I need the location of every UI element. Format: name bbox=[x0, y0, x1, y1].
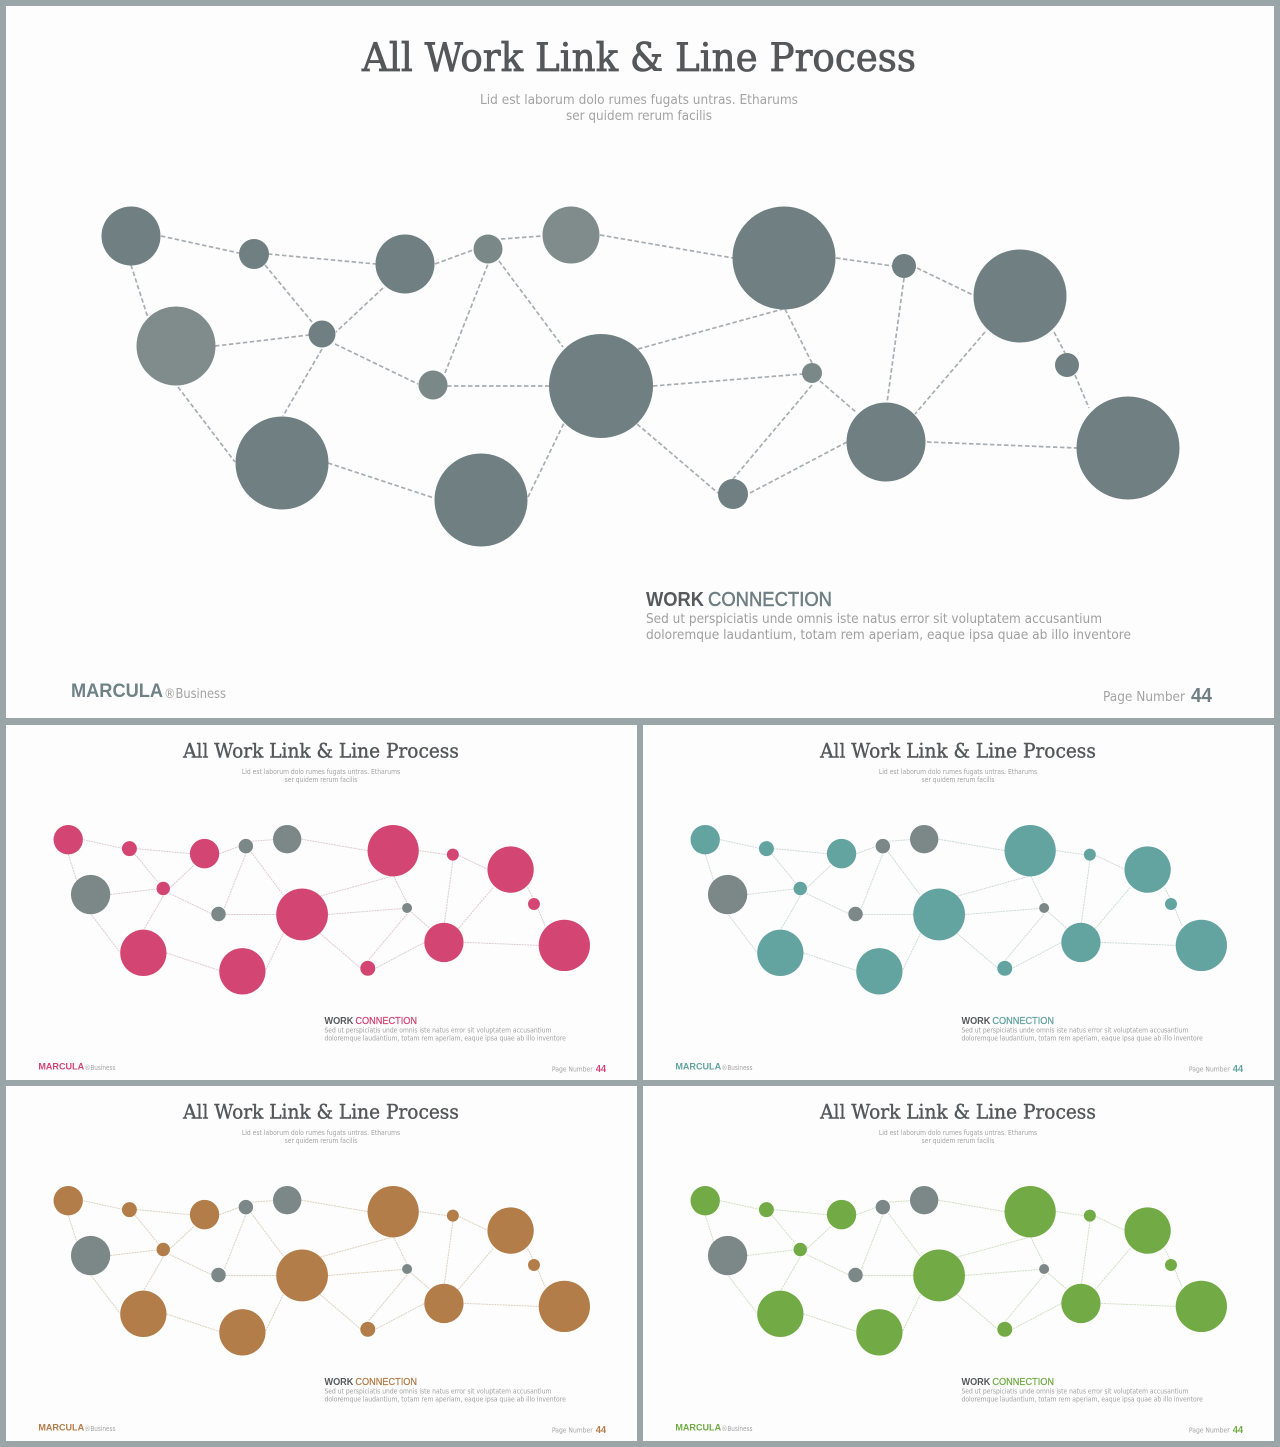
page number: 44 bbox=[596, 1425, 607, 1436]
page number: Page Number bbox=[552, 1427, 593, 1435]
heading: work connection bbox=[324, 1377, 417, 1388]
subtitle bbox=[480, 92, 798, 124]
heading: work connection: WORK bbox=[961, 1377, 991, 1388]
subtitle: Lid est laborum dolo rumes fugats untras. Etharums bbox=[242, 768, 401, 776]
brand logo: MARCULA bbox=[71, 681, 163, 702]
heading: work connection: CONNECTION bbox=[992, 1016, 1054, 1027]
page number: 44 bbox=[1233, 1425, 1244, 1436]
subtitle: ser quidem rerum facilis bbox=[285, 776, 358, 784]
brand logo bbox=[38, 1062, 116, 1073]
page number bbox=[1103, 685, 1213, 707]
heading: work connection bbox=[324, 1016, 417, 1027]
brand logo bbox=[71, 681, 226, 702]
body text bbox=[324, 1388, 566, 1404]
subtitle: ser quidem rerum facilis bbox=[285, 1137, 358, 1145]
subtitle bbox=[242, 1129, 401, 1145]
heading: work connection: WORK bbox=[324, 1016, 354, 1027]
body text bbox=[646, 611, 1131, 643]
subtitle: Lid est laborum dolo rumes fugats untras. Etharums bbox=[879, 1129, 1038, 1137]
network connection lines bbox=[131, 235, 1089, 498]
network connection lines bbox=[68, 839, 545, 970]
title: All Work Link & Line Process bbox=[361, 36, 916, 81]
page number: Page Number bbox=[1103, 689, 1185, 705]
heading: work connection: CONNECTION bbox=[355, 1377, 417, 1388]
panel: pink slide bbox=[6, 725, 637, 1080]
brand logo: MARCULA bbox=[675, 1062, 721, 1073]
brand logo: ®Business bbox=[85, 1064, 116, 1072]
network nodes bbox=[54, 1186, 590, 1355]
page number bbox=[552, 1064, 607, 1075]
panel: green slide bbox=[643, 1086, 1274, 1441]
heading: work connection bbox=[961, 1016, 1054, 1027]
page number bbox=[552, 1425, 607, 1436]
brand logo: ®Business bbox=[722, 1425, 753, 1433]
title: All Work Link & Line Process bbox=[819, 1100, 1096, 1123]
subtitle: ser quidem rerum facilis bbox=[922, 776, 995, 784]
heading: work connection: WORK bbox=[646, 589, 705, 611]
brand logo: ®Business bbox=[85, 1425, 116, 1433]
page number bbox=[1189, 1425, 1244, 1436]
body text: Sed ut perspiciatis unde omnis iste natus error sit voluptatem accusantium bbox=[961, 1027, 1188, 1035]
network connection lines bbox=[705, 839, 1182, 970]
heading: work connection: CONNECTION bbox=[708, 589, 832, 611]
body text: Sed ut perspiciatis unde omnis iste natus error sit voluptatem accusantium bbox=[324, 1027, 551, 1035]
body text: doloremque laudantium, totam rem aperiam, eaque ipsa quae ab illo inventore bbox=[324, 1035, 566, 1043]
brand logo: ®Business bbox=[722, 1064, 753, 1072]
brand logo bbox=[38, 1423, 116, 1434]
page number: Page Number bbox=[552, 1066, 593, 1074]
brand logo: ®Business bbox=[164, 686, 226, 702]
heading: work connection: CONNECTION bbox=[992, 1377, 1054, 1388]
body text: doloremque laudantium, totam rem aperiam, eaque ipsa quae ab illo inventore bbox=[961, 1035, 1203, 1043]
heading: work connection: WORK bbox=[324, 1377, 354, 1388]
body text: Sed ut perspiciatis unde omnis iste natus error sit voluptatem accusantium bbox=[324, 1388, 551, 1396]
title: All Work Link & Line Process bbox=[182, 1100, 459, 1123]
title: All Work Link & Line Process bbox=[182, 739, 459, 762]
title: All Work Link & Line Process bbox=[819, 739, 1096, 762]
subtitle bbox=[879, 1129, 1038, 1145]
network nodes bbox=[102, 206, 1180, 546]
brand logo bbox=[675, 1062, 753, 1073]
body text: doloremque laudantium, totam rem aperiam, eaque ipsa quae ab illo inventore bbox=[324, 1396, 566, 1404]
subtitle: Lid est laborum dolo rumes fugats untras. Etharums bbox=[879, 768, 1038, 776]
page number: Page Number bbox=[1189, 1066, 1230, 1074]
network connection lines bbox=[68, 1200, 545, 1331]
body text: Sed ut perspiciatis unde omnis iste natus error sit voluptatem accusantium bbox=[961, 1388, 1188, 1396]
page number: 44 bbox=[1191, 685, 1213, 707]
network connection lines bbox=[705, 1200, 1182, 1331]
body text bbox=[961, 1027, 1203, 1043]
panel: teal slide bbox=[643, 725, 1274, 1080]
heading: work connection bbox=[961, 1377, 1054, 1388]
network nodes bbox=[691, 825, 1227, 994]
page number: 44 bbox=[596, 1064, 607, 1075]
body text bbox=[961, 1388, 1203, 1404]
body text: doloremque laudantium, totam rem aperiam, eaque ipsa quae ab illo inventore bbox=[961, 1396, 1203, 1404]
subtitle: Lid est laborum dolo rumes fugats untras. Etharums bbox=[480, 92, 798, 108]
brand logo: MARCULA bbox=[38, 1062, 84, 1073]
heading: work connection: CONNECTION bbox=[355, 1016, 417, 1027]
subtitle bbox=[242, 768, 401, 784]
subtitle: ser quidem rerum facilis bbox=[922, 1137, 995, 1145]
page number: Page Number bbox=[1189, 1427, 1230, 1435]
body text bbox=[324, 1027, 566, 1043]
network nodes bbox=[691, 1186, 1227, 1355]
brand logo: MARCULA bbox=[675, 1423, 721, 1434]
page number: 44 bbox=[1233, 1064, 1244, 1075]
brand logo: MARCULA bbox=[38, 1423, 84, 1434]
body text: Sed ut perspiciatis unde omnis iste natus error sit voluptatem accusantium bbox=[646, 611, 1102, 627]
body text: doloremque laudantium, totam rem aperiam, eaque ipsa quae ab illo inventore bbox=[646, 627, 1131, 643]
subtitle: ser quidem rerum facilis bbox=[566, 108, 712, 124]
heading: work connection: WORK bbox=[961, 1016, 991, 1027]
panel: brown slide bbox=[6, 1086, 637, 1441]
page number bbox=[1189, 1064, 1244, 1075]
subtitle bbox=[879, 768, 1038, 784]
heading: work connection bbox=[646, 589, 832, 611]
brand logo bbox=[675, 1423, 753, 1434]
panel: main grey slide bbox=[6, 6, 1274, 718]
network nodes bbox=[54, 825, 590, 994]
subtitle: Lid est laborum dolo rumes fugats untras. Etharums bbox=[242, 1129, 401, 1137]
